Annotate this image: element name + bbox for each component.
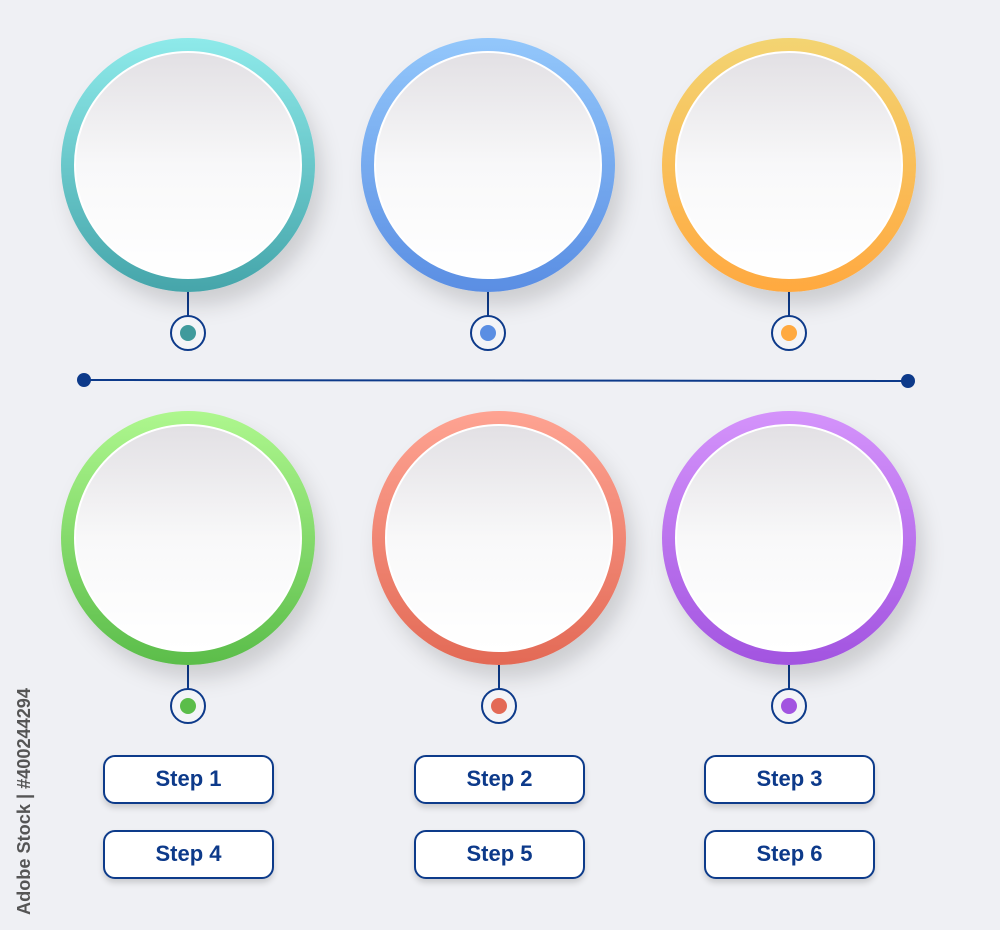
button: Step 3: Step 3 <box>756 766 823 791</box>
watermark text: Adobe Stock | #400244294 <box>13 687 34 915</box>
button: Step 4 <box>104 831 273 878</box>
button: Step 2: Step 2 <box>466 766 533 791</box>
circle: purple <box>662 411 916 723</box>
button: Step 5 <box>415 831 584 878</box>
timeline line <box>77 373 915 388</box>
button: Step 4: Step 4 <box>155 841 222 866</box>
circle: teal <box>61 38 315 350</box>
circle: yellow <box>662 38 916 350</box>
circle: red <box>372 411 626 723</box>
button: Step 2 <box>415 756 584 803</box>
button: Step 1: Step 1 <box>155 766 222 791</box>
circle: blue <box>361 38 615 350</box>
button: Step 6: Step 6 <box>756 841 823 866</box>
button: Step 3 <box>705 756 874 803</box>
circle: green <box>61 411 315 723</box>
button: Step 5: Step 5 <box>466 841 533 866</box>
button: Step 6 <box>705 831 874 878</box>
button: Step 1 <box>104 756 273 803</box>
